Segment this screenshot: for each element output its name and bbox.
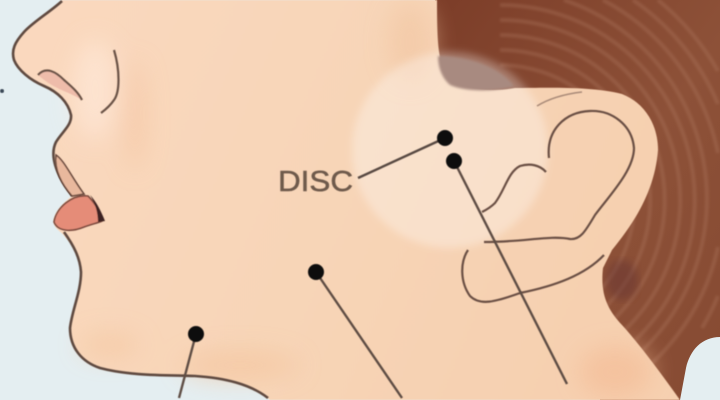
label: DISC: DISC [278, 166, 353, 198]
nose wing [101, 50, 118, 113]
profile outline [13, 1, 268, 398]
marker: joint [446, 153, 462, 169]
ear [462, 92, 634, 302]
lips [54, 155, 105, 230]
edge speck [0, 89, 4, 93]
marker: jaw [308, 264, 324, 280]
leader line: disc [358, 138, 445, 178]
leader line: chin [179, 334, 196, 398]
marker: disc [437, 130, 453, 146]
face shading [73, 2, 651, 398]
grey hair overlap [438, 56, 514, 90]
jaw joint highlight circle [352, 52, 548, 248]
leader line: joint [454, 161, 567, 384]
leader line: jaw [316, 272, 402, 398]
nostril [38, 71, 82, 100]
marker: chin [188, 326, 204, 342]
hair [435, 0, 720, 400]
